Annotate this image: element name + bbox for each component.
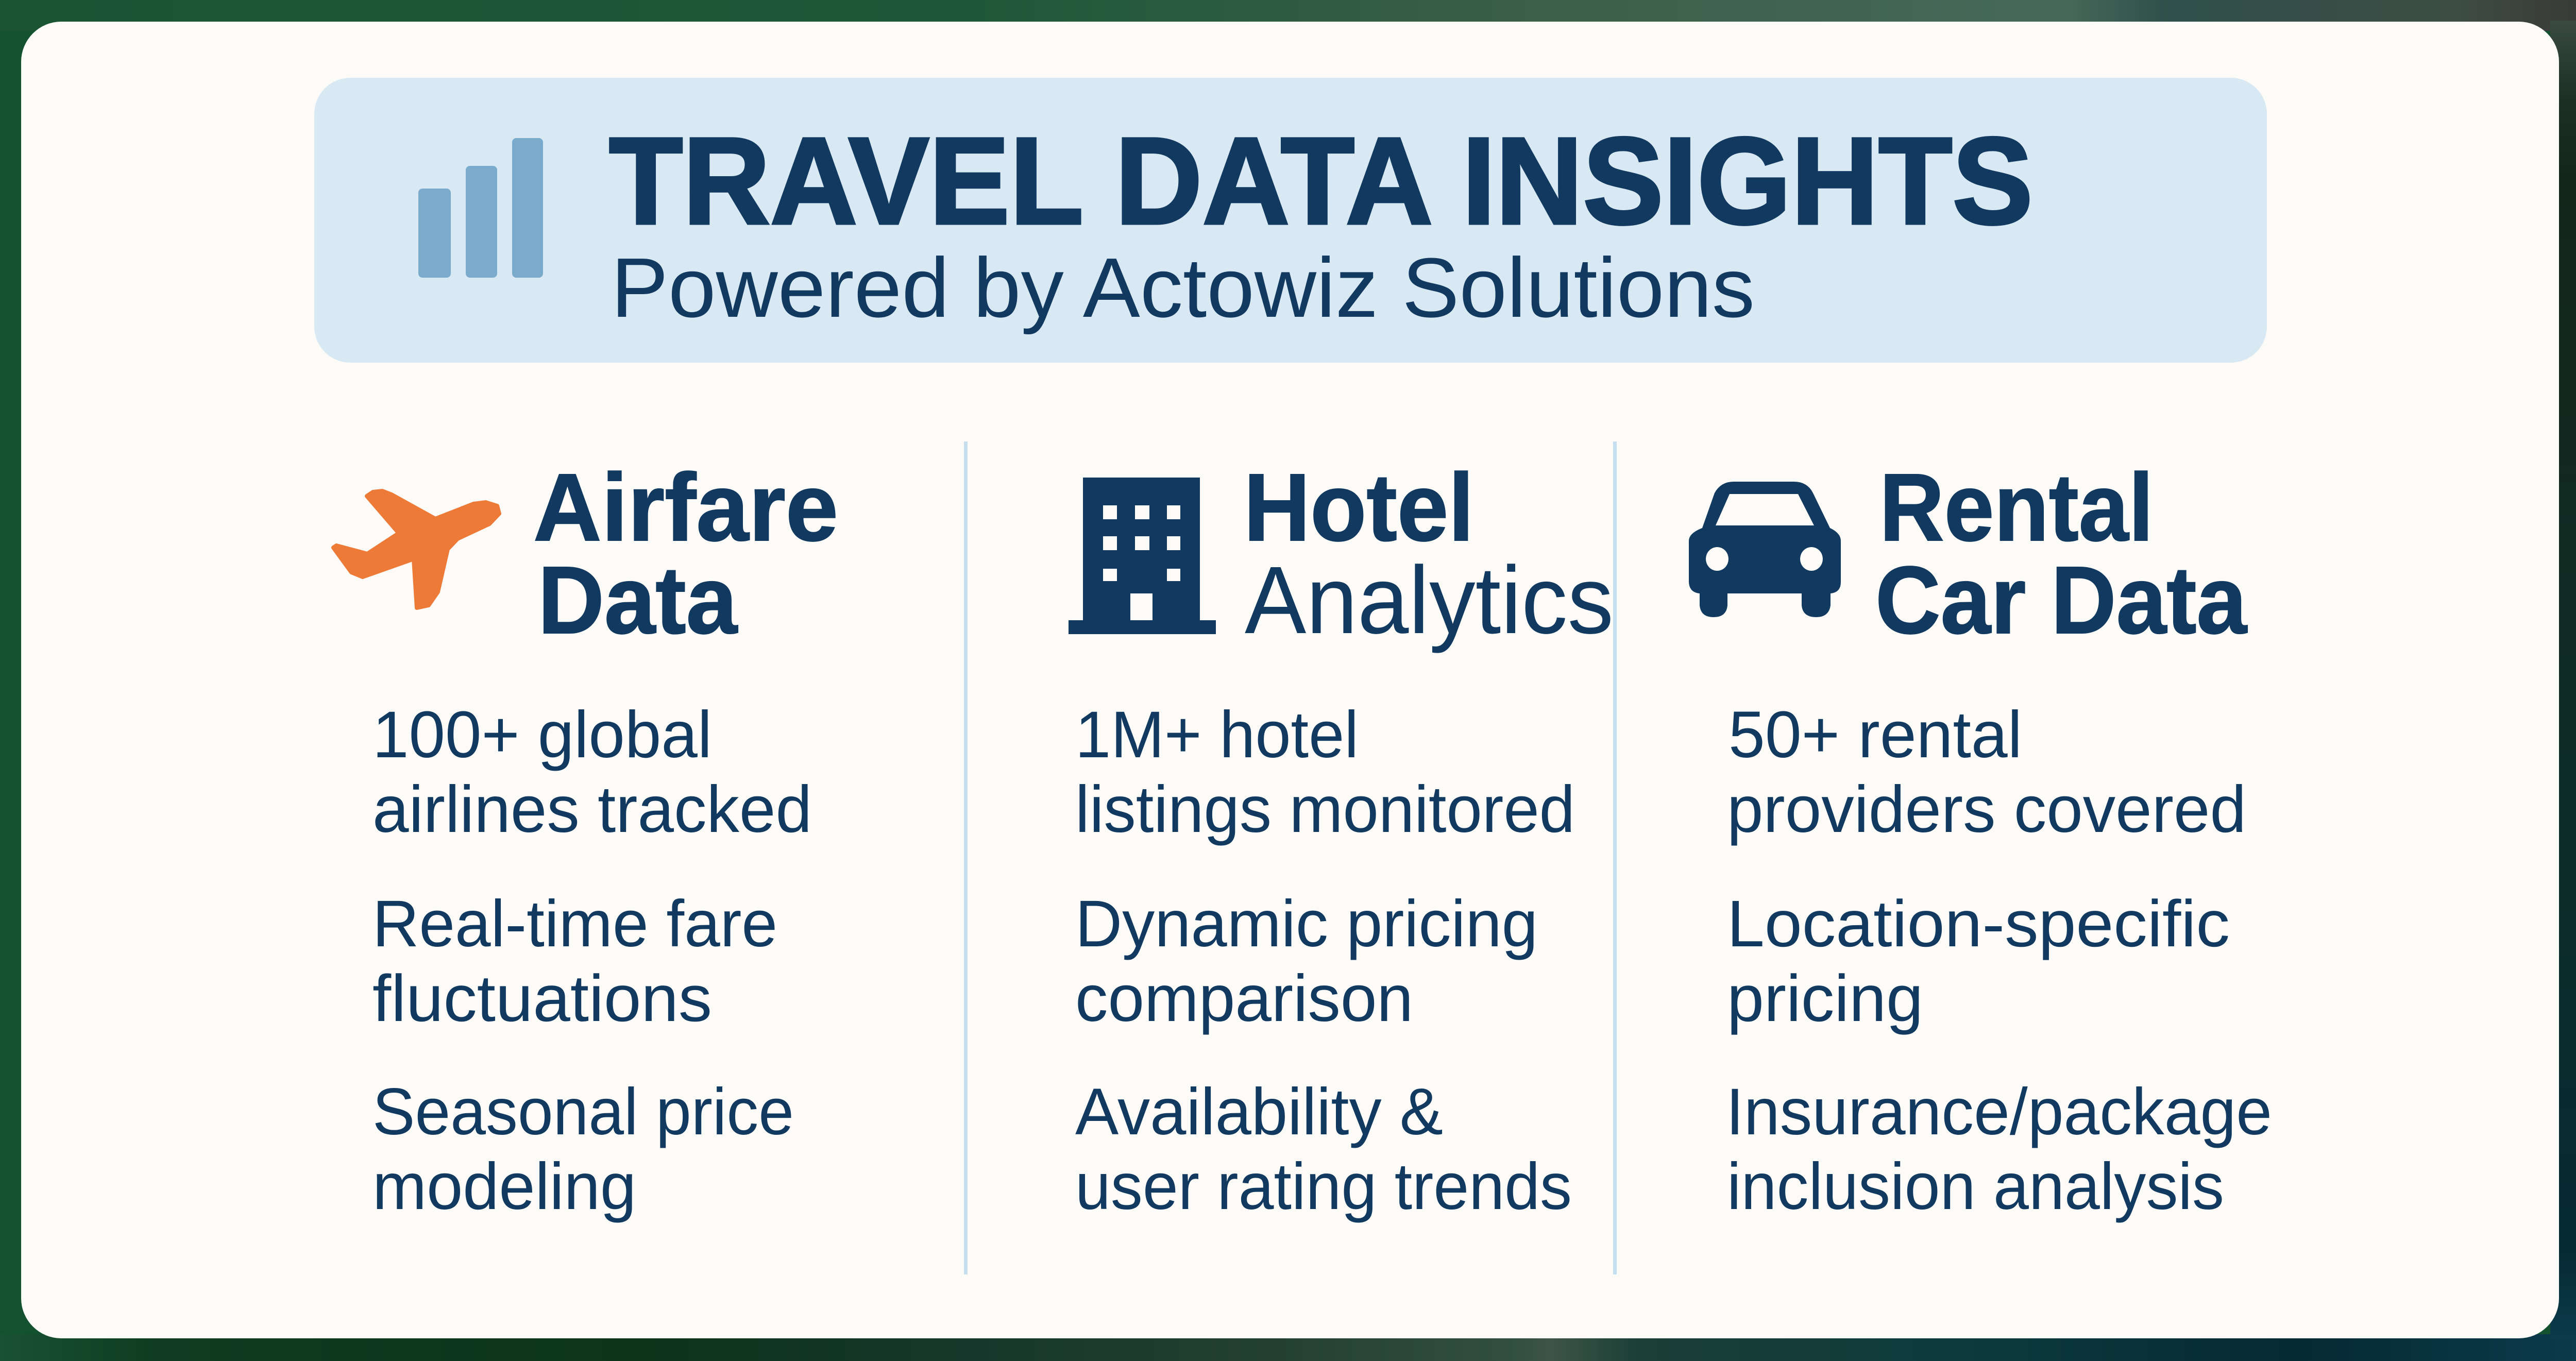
bullet list: Dynamic pricing: [1075, 887, 1538, 961]
heading: Hotel: [1244, 454, 1474, 561]
bullet list: Insurance/package: [1726, 1075, 2272, 1149]
heading line 2: Data: [538, 547, 738, 654]
panel: header banner: [314, 78, 2267, 363]
bullet list: fluctuations: [372, 962, 712, 1035]
panel: airfare data: [333, 454, 838, 1223]
bullet list: listings monitored: [1075, 773, 1575, 846]
bullet list: [1075, 698, 1575, 1223]
bullet list: 1M+ hotel: [1075, 698, 1359, 772]
panel: hotel analytics: [1069, 454, 1614, 1223]
title: TRAVEL DATA INSIGHTS: [609, 112, 2033, 250]
bullet list: providers covered: [1727, 773, 2246, 846]
divider: right: [1613, 441, 1617, 1274]
subtitle: Powered by Actowiz Solutions: [611, 241, 1755, 335]
icon: hotel building: [1069, 478, 1216, 634]
heading line 2: Analytics: [1245, 547, 1614, 654]
icon: car: [1689, 482, 1841, 617]
bullet list: 100+ global: [372, 698, 712, 772]
divider: left: [964, 441, 968, 1274]
heading: Airfare: [533, 454, 838, 561]
bullet list: 50+ rental: [1728, 698, 2022, 772]
bullet list: Real-time fare: [372, 887, 777, 961]
panel: rental car data: [1689, 454, 2272, 1223]
bullet list: user rating trends: [1075, 1150, 1572, 1223]
icon: airplane: [333, 491, 499, 608]
bullet list: [1726, 698, 2272, 1223]
bullet list: modeling: [372, 1150, 636, 1223]
bullet list: pricing: [1727, 962, 1923, 1035]
bullet list: inclusion analysis: [1727, 1150, 2224, 1223]
heading line 2: Car Data: [1875, 547, 2247, 654]
icon: bar chart: [418, 138, 543, 278]
heading: Rental: [1879, 454, 2154, 561]
bullet list: comparison: [1075, 962, 1413, 1035]
bullet list: Seasonal price: [372, 1075, 794, 1149]
bullet list: Availability &: [1075, 1075, 1443, 1149]
bullet list: airlines tracked: [372, 773, 812, 846]
bullet list: [372, 698, 812, 1223]
bullet list: Location-specific: [1727, 887, 2230, 961]
